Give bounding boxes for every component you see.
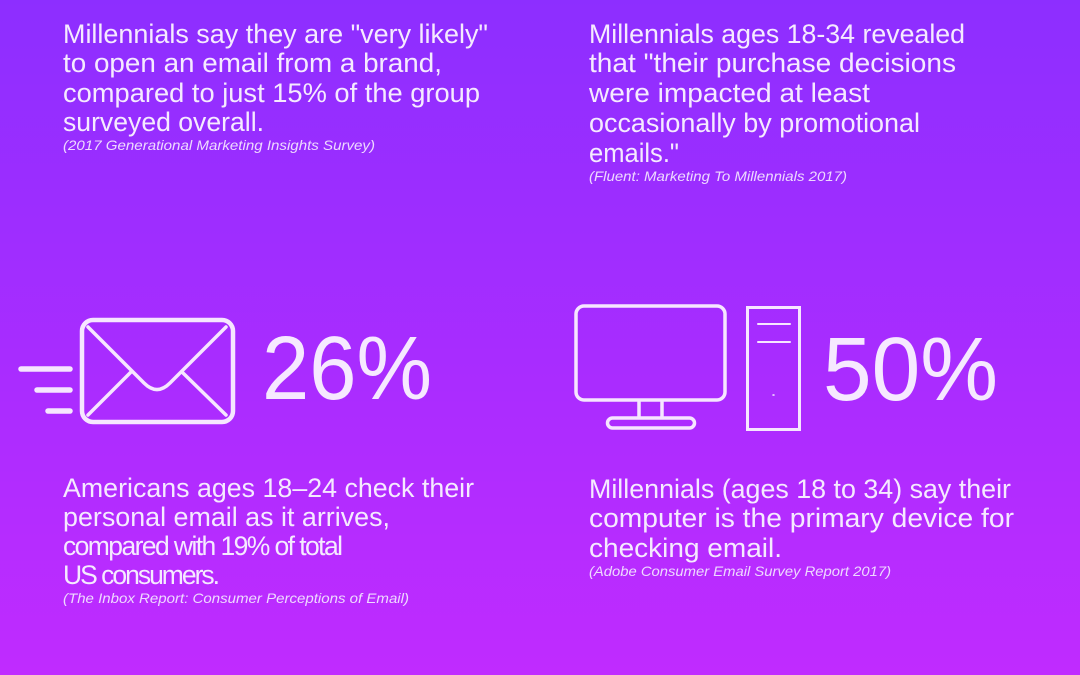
- text block: very likely to open an email: compared to just 15% of the group: [63, 78, 480, 108]
- text block: computer is primary device: [589, 474, 1014, 579]
- text block: purchase decisions: were impacted at least: [588, 78, 871, 108]
- text block: computer is primary device: computer is the primary device for: [589, 503, 1014, 533]
- text block: check personal email: personal email as it arrives,: [63, 502, 390, 532]
- icon: desktop computer and tower: [576, 306, 800, 430]
- text block: purchase decisions: Millennials ages 18-34 revealed: [589, 19, 965, 49]
- stat: 50%: 50%: [823, 320, 998, 420]
- text block: computer is primary device: (Adobe Consumer Email Survey Report 2017): [589, 563, 891, 579]
- text block: check personal email: [63, 473, 474, 606]
- text block: computer is primary device: checking email.: [589, 533, 782, 563]
- text block: very likely to open an email: Millennials say they are "very likely": [63, 19, 488, 49]
- text block: check personal email: compared with 19% of total: [63, 531, 343, 561]
- text block: purchase decisions: that "their purchase decisions: [589, 48, 956, 78]
- text block: purchase decisions: occasionally by promotional: [589, 108, 920, 138]
- text block: check personal email: (The Inbox Report: Consumer Perceptions of Email): [63, 590, 409, 606]
- text block: purchase decisions: emails.": [589, 138, 679, 168]
- text block: very likely to open an email: (2017 Generational Marketing Insights Survey): [63, 137, 375, 153]
- text block: very likely to open an email: [63, 19, 488, 153]
- text block: check personal email: Americans ages 18–24 check their: [63, 473, 474, 503]
- text block: very likely to open an email: surveyed overall.: [63, 107, 264, 137]
- stat: 26%: 26%: [262, 319, 432, 419]
- text block: purchase decisions: (Fluent: Marketing To Millennials 2017): [589, 168, 847, 184]
- text block: purchase decisions: [588, 19, 965, 184]
- text block: computer is primary device: Millennials (ages 18 to 34) say their: [589, 474, 1011, 504]
- text block: check personal email: US consumers.: [63, 560, 220, 590]
- text block: very likely to open an email: to open an email from a brand,: [63, 48, 442, 78]
- icon: envelope with speed lines: [21, 320, 233, 422]
